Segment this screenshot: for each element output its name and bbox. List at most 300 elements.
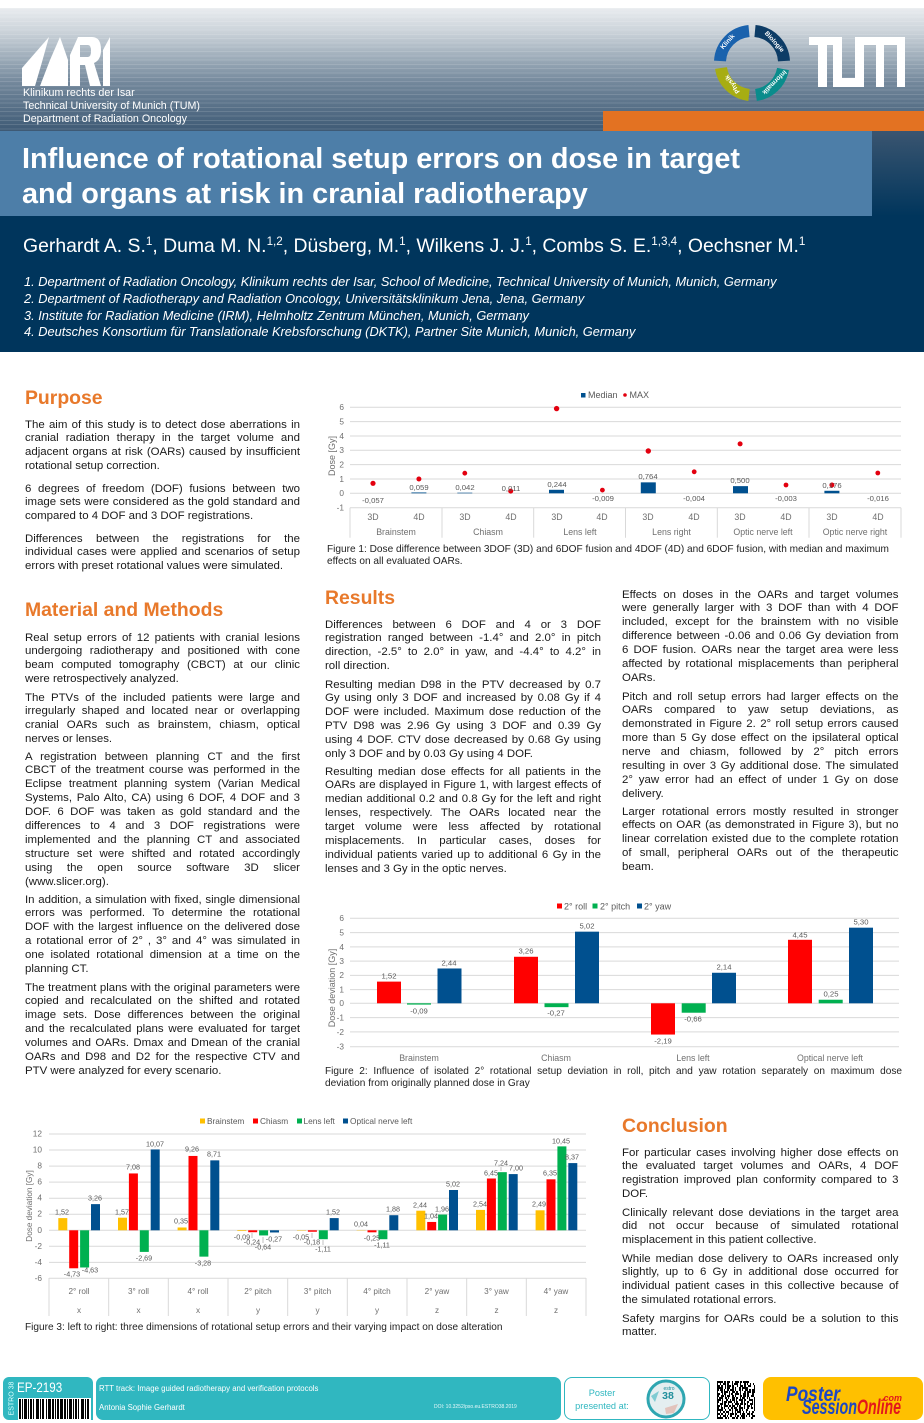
chart: figure 1 dose difference: Brainstem (376, 527, 416, 537)
chart: figure 3 rotational errors: 4° roll (187, 1287, 209, 1296)
chart: figure 1 dose difference: Lens left (563, 527, 597, 537)
poster number: EP-2193 (17, 1380, 62, 1395)
chart: figure 3 rotational errors: x (196, 1306, 200, 1315)
text: methods 3: CBCT of the treatment course was performed in the (25, 764, 300, 776)
chart: figure 3 rotational errors: 6,35 (543, 1168, 557, 1178)
title (22, 143, 740, 210)
text: methods 2: cranial OARs such as brainstem, chiasm, optical (25, 719, 300, 731)
chart: figure 3 rotational errors: 8 (37, 1160, 42, 1170)
text: methods 5: The treatment plans with the original parameters were (25, 982, 300, 994)
text: methods 4 (25, 894, 300, 975)
text: results 5: Pitch and roll setup errors had larger effects on the (622, 690, 898, 702)
chart: figure 3 rotational errors: 7,08 (126, 1162, 140, 1172)
chart: figure 2 dose deviation: 5,02 (580, 921, 594, 930)
qr code (717, 1381, 755, 1419)
chart: figure 3 rotational errors: -4 (35, 1257, 42, 1267)
logo: ring: Klinik (719, 33, 737, 51)
chart: figure 3 rotational errors: z (435, 1306, 439, 1315)
chart: figure 2 dose deviation: Optical nerve left (797, 1053, 864, 1063)
presented text: presented at: (575, 1400, 629, 1410)
chart: figure 1 dose difference: Lens right (652, 527, 691, 537)
chart: figure 3 rotational errors: 1,52 (55, 1208, 69, 1216)
text: methods 2 (25, 692, 300, 745)
legend: figure 3: Chiasm (260, 1116, 288, 1126)
footer: presented at box (564, 1377, 710, 1420)
chart: figure 3 rotational errors: x (77, 1306, 81, 1315)
text: purpose 1: rotational setup correction. (25, 460, 160, 472)
chart: figure 1 dose difference: 3D (642, 512, 654, 522)
chart: figure 1 dose difference: 3D (459, 512, 471, 522)
chart: figure 1 dose difference: Dose [Gy] (327, 436, 337, 476)
chart: figure 3 rotational errors: z (554, 1306, 558, 1315)
text: results 5: nerve and chiasm, followed by 2° pitch errors (622, 746, 898, 758)
chart: figure 1 dose difference: 0,500 (730, 476, 750, 485)
chart: figure 1 dose difference: 5 (339, 416, 344, 426)
text: results 5: more than 5 Gy dose effect on the ipsilateral optical (622, 732, 898, 744)
chart: figure 1 dose difference: 3 (339, 445, 344, 455)
text: conclusion 1 (622, 1146, 898, 1200)
chart: figure 1 dose difference: 4D (688, 512, 700, 522)
text: methods 5: OARs and D98 and D2 for the respective CTV and (25, 1051, 300, 1063)
text: results 4: included, except for the brainstem with no visible (622, 616, 898, 628)
caption: figure 3: Figure 3: left to right: three dimensions of rotational setup errors and their varying impact on dose alteration (25, 1322, 502, 1333)
chart: figure 3 rotational errors: -3,28 (195, 1258, 211, 1268)
chart: figure 3 rotational errors: 3° yaw (484, 1287, 509, 1296)
chart: figure 1 dose difference: 4D (505, 512, 517, 522)
text: purpose 2: image sets were considered as the gold standard and (25, 496, 300, 508)
text: results 5: delivery. (622, 788, 664, 800)
text: results 1: registration ranged between -1.4° and 2.0° in pitch (325, 632, 601, 644)
text: results 5: 2° yaw error had an effect of under 1 Gy on dose (622, 774, 898, 786)
chart: figure 1 dose difference: 0,176 (822, 481, 842, 490)
heading: Conclusion: Conclusion (622, 1114, 728, 1136)
text: results 6: Larger rotational errors mostly resulted in stronger (622, 806, 898, 818)
chart: figure 3 rotational errors: 4° pitch (363, 1287, 391, 1296)
chart: figure 3 rotational errors: 1,96 (435, 1204, 449, 1214)
chart: figure 3 rotational errors: y (315, 1306, 320, 1315)
text: purpose 1: adjacent organs at risk (OARs) caused by insufficient (25, 446, 300, 458)
chart: figure 3 rotational errors: 0,04 (354, 1220, 368, 1228)
text: purpose 1 (25, 418, 300, 472)
text: methods 4: DOF with the largest influence on the delivered dose (25, 921, 300, 933)
congress logo: 38 (662, 1390, 674, 1402)
text: results 4: were generally larger with 3 DOF than with 4 DOF (622, 602, 898, 614)
text: conclusion 3: individual patient cases in this collective because of (622, 1280, 898, 1292)
text: methods 3: Systems, Palo Alto, CA) using 6 DOF, 4 DOF and 3 (25, 792, 300, 804)
text: results 4: 6 DOF fusion. OARs near the target area were less (622, 644, 898, 656)
presented text: Poster (589, 1388, 615, 1398)
logo: ring: Physik (724, 73, 742, 94)
chart: figure 3 rotational errors: -0,24 (244, 1238, 260, 1246)
text: conclusion 1: For particular cases involving higher dose effects on (622, 1146, 898, 1158)
chart: figure 3 rotational errors: 12 (33, 1128, 42, 1138)
chart: figure 1 dose difference: 3D (734, 512, 746, 522)
text: results 3: misplacements. In particular cases, doses for (325, 835, 601, 847)
heading: Results: Results (325, 586, 395, 608)
text: methods 3: implemented and the planning CT and associated (25, 834, 300, 846)
chart: figure 3 rotational errors: 2° pitch (244, 1287, 272, 1296)
congress logo (646, 1380, 686, 1418)
chart: figure 3 rotational errors: -4,63 (82, 1266, 98, 1274)
chart: figure 2 dose deviation: -0,66 (684, 1015, 702, 1024)
chart: figure 3 rotational errors: 0 (37, 1225, 42, 1235)
chart: figure 1 dose difference: Chiasm (473, 527, 503, 537)
text: results 2: Resulting median D98 in the PTV decreased by 0.7 (325, 678, 601, 690)
chart: figure 3 rotational errors: 5,02 (446, 1180, 460, 1188)
legend: figure 3: Lens left (304, 1116, 336, 1126)
text: methods 2: irregularly shaped and located near or overlapping (25, 705, 300, 717)
chart: figure 1 dose difference: 0,011 (502, 484, 520, 493)
chart: figure 3 rotational errors: 6 (37, 1176, 42, 1186)
chart: figure 3 rotational errors: 2,44 (413, 1200, 427, 1210)
chart: figure 1 dose difference: -0,009 (592, 494, 614, 503)
chart: figure 3 rotational errors: 7,24 (494, 1158, 508, 1168)
text: results 3: OARs are displayed in Figure 1, with largest effects of (325, 779, 601, 791)
caption: figure 2: deviation from originally planned dose in Gray (325, 1078, 530, 1089)
chart: figure 3 rotational errors: 4° yaw (544, 1287, 568, 1296)
text: results 4: Effects on doses in the OARs and target volumes (622, 588, 898, 600)
text: methods 5 (25, 982, 300, 1077)
legend: figure 1: Median (588, 390, 618, 400)
chart: figure 3 rotational errors: 8,37 (565, 1152, 579, 1162)
text: methods 1: beam computed tomography (CBCT) at our clinic (25, 659, 300, 671)
chart: figure 2 dose deviation: 3,26 (519, 946, 533, 955)
chart: figure 3 rotational errors: -4,73 (64, 1270, 80, 1278)
chart: figure 3 rotational errors: 1,04 (424, 1212, 438, 1220)
median bars (411, 482, 839, 493)
text: methods 5: volumes and OARs. Dmax and Dmean of the cranial (25, 1037, 300, 1049)
logo: ring (714, 25, 790, 101)
chart: figure 1 dose difference: 1 (339, 474, 344, 484)
poster session online logo: .com (881, 1393, 902, 1403)
chart: figure 1 dose difference (327, 390, 902, 538)
legend: figure 2 (557, 902, 672, 912)
chart: figure 2 dose deviation: 1 (339, 984, 344, 994)
footer: track box (96, 1377, 561, 1420)
legend: figure 1: MAX (630, 390, 649, 400)
text: results 3: lenses and 3 Gy in the optic nerves. (325, 863, 507, 875)
text: results 3: median additional 0.2 and 0.8 Gy for the left and right (325, 793, 601, 805)
presented text (575, 1388, 629, 1411)
chart: figure 2 dose deviation: -2,19 (654, 1037, 672, 1046)
text: methods 3: structure set were shifted and rotated accordingly (25, 848, 300, 860)
text: conclusion 1: DOF. (622, 1188, 648, 1200)
affiliations (24, 274, 778, 339)
text: methods 3: (www.slicer.org). (25, 876, 109, 888)
chart: figure 2 dose deviation (327, 902, 899, 1063)
chart: figure 2 dose deviation: 2 (339, 970, 344, 980)
text: conclusion 2: misplacement in this patient collective. (622, 1234, 817, 1246)
chart: figure 3 rotational errors: 8,71 (207, 1150, 221, 1158)
chart: figure 1 dose difference: -0,003 (775, 494, 797, 503)
chart: figure 3 rotational errors: z (494, 1306, 499, 1315)
chart: figure 2 dose deviation: 6 (339, 913, 344, 923)
barcode (18, 1398, 91, 1420)
legend: figure 3: Brainstem (207, 1116, 244, 1126)
chart: figure 3 rotational errors: 1,88 (386, 1204, 400, 1214)
text: methods 5: image sets. Dose differences between the original (25, 1009, 300, 1021)
institution lines: Technical University of Munich (TUM) (23, 100, 200, 112)
text: methods 3: using the open source software 3D slicer (25, 862, 300, 874)
orange accent bar (603, 111, 924, 131)
chart: figure 1 dose difference: Optic nerve right (823, 527, 888, 537)
chart: figure 2 dose deviation: Lens left (676, 1053, 710, 1063)
text: results 2: Gy using only 3 DOF and increased by 0.08 Gy if 4 (325, 692, 601, 704)
text: methods 3: A registration between planning CT and the first (25, 750, 300, 762)
authors: Gerhardt A. S.1, Duma M. N.1,2, Düsberg, M.1, Wilkens J. J.1, Combs S. E.1,3,4, Oechsner M.1 (23, 235, 805, 257)
text: methods 4: a rotational error of 2° , 3° and 4° was simulated in (25, 935, 300, 947)
chart: figure 1 dose difference: 2 (339, 460, 344, 470)
chart: figure 2 dose deviation: 4 (339, 942, 344, 952)
text: results 4: affected by rotational misplacements than peripheral (622, 658, 898, 670)
chart: figure 1 dose difference: Optic nerve left (733, 527, 793, 537)
text: methods 2: nerves or lenses. (25, 733, 112, 745)
chart: figure 3 rotational errors: -0,09 (234, 1232, 250, 1242)
header banner (0, 8, 924, 131)
institution lines (23, 87, 200, 125)
chart: figure 2 dose deviation: -1 (337, 1012, 344, 1022)
chart: figure 3 rotational errors: -1,11 (374, 1240, 390, 1250)
text: purpose 3 (25, 532, 300, 572)
chart: figure 1 dose difference: 3D (551, 512, 563, 522)
chart: figure 3 rotational errors: 2° yaw (425, 1287, 449, 1296)
chart: figure 1 dose difference: -0,004 (683, 494, 706, 503)
dark navy header background (0, 131, 924, 352)
text: results 5: OARs compared to yaw setup deviations, as (622, 704, 898, 716)
chart: figure 2 dose deviation: 2,44 (442, 959, 457, 968)
legend: figure 2: 2° pitch (600, 902, 630, 912)
caption: figure 1: effects on all evaluated OARs. (327, 556, 463, 567)
text: purpose 3: errors with preset rotational values were simulated. (25, 560, 283, 572)
text: methods 4: In addition, a simulation with fixed, single dimensional (25, 894, 300, 906)
chart: figure 3 rotational errors: 2,49 (532, 1200, 546, 1208)
text: conclusion 4: matter. (622, 1326, 657, 1338)
chart: figure 2 dose deviation: -2 (337, 1027, 344, 1037)
text: results 4: difference between -0.06 and 0.06 Gy deviation from (622, 630, 898, 642)
text: methods 2: The PTVs of the included patients were large and (25, 692, 300, 704)
chart: figure 2 dose deviation: 4,45 (793, 931, 807, 940)
text: results 5 (622, 690, 898, 800)
text: conclusion 2: did not occur because of simulated rotational (622, 1220, 898, 1232)
text: results 3: individual patients varied up to additional 6 Gy in the (325, 849, 601, 861)
chart: figure 3 rotational errors: 1,57 (115, 1208, 129, 1216)
chart: figure 3 rotational errors: -0,27 (266, 1234, 282, 1244)
text: results 6: of small, peripheral OARs out of the therapeutic (622, 847, 898, 859)
text: methods 4: errors was performed. To determine the rotational (25, 907, 300, 919)
chart: figure 3 rotational errors: 10,07 (146, 1140, 164, 1148)
logo: ring: Biologie (763, 30, 786, 54)
text: conclusion 1: registration improved plan conformity compared to 3 (622, 1174, 898, 1186)
poster session online logo: Session (802, 1396, 857, 1419)
footer: poster id box (3, 1377, 93, 1420)
legend: figure 1 (581, 390, 649, 400)
chart: figure 2 dose deviation: Chiasm (541, 1053, 571, 1063)
text: results 5: resulting in over 3 Gy additional dose. The simulated (622, 760, 898, 772)
institution lines: Klinikum rechts der Isar (23, 87, 135, 99)
title: and organs at risk in cranial radiotherapy (22, 178, 588, 210)
chart: figure 2 dose deviation: 0 (339, 998, 344, 1008)
heading: Purpose: Purpose (25, 386, 103, 408)
heading: Material and Methods: Material and Methods (25, 598, 223, 620)
author text: Antonia Sophie Gerhardt (99, 1403, 185, 1412)
text: results 1: Differences between 6 DOF and 4 or 3 DOF (325, 618, 601, 630)
text: conclusion 4 (622, 1312, 898, 1338)
chart: figure 3 rotational errors: 1,52 (326, 1208, 340, 1216)
text: conclusion 1: the evaluated target volumes and OARs, 4 DOF (622, 1160, 898, 1172)
chart: figure 1 dose difference: 4D (596, 512, 608, 522)
caption: figure 2 (325, 1066, 902, 1089)
chart: figure 2 dose deviation: -0,27 (547, 1008, 565, 1017)
chart: figure 1 dose difference: -0,057 (362, 496, 384, 505)
text: results 2: DOF were included. Maximum dose reduction of the (325, 706, 601, 718)
chart: figure 2 dose deviation: 5 (339, 928, 344, 938)
title: Influence of rotational setup errors on dose in target (22, 143, 740, 175)
chart: figure 3 rotational errors: 6,45 (484, 1168, 498, 1178)
text: results 4: OARs. (622, 672, 656, 684)
chart: figure 3 rotational errors: 2° roll (68, 1287, 90, 1296)
chart: figure 1 dose difference: 3D (826, 512, 838, 522)
text: methods 3 (25, 750, 300, 888)
chart: figure 1 dose difference: 3D (367, 512, 379, 522)
chart: figure 3 rotational errors: Dose deviation [Gy] (25, 1170, 34, 1242)
text: results 2: only 3 DOF and by 0.03 Gy using 4 DOF. (325, 748, 533, 760)
max markers (370, 406, 880, 494)
affiliations: 1. Department of Radiation Oncology, Klinikum rechts der Isar, School of Medicine, Technical University of Munich, Munich, Germany (24, 274, 777, 289)
chart: figure 2 dose deviation: -0,09 (410, 1007, 428, 1016)
text: conclusion 3: slightly, up to 6 Gy in additional dose occurred for (622, 1266, 898, 1278)
text: conclusion 3: While median dose delivery to OARs increased only (622, 1252, 898, 1264)
legend: figure 2: 2° yaw (644, 902, 672, 912)
chart: figure 3 rotational errors: 7,00 (509, 1164, 523, 1172)
poster session online logo: Poster (786, 1383, 842, 1406)
chart: figure 3 rotational errors: -0,64 (255, 1242, 271, 1252)
congress logo: estro (663, 1386, 675, 1392)
chart: figure 3 rotational errors: 9,26 (185, 1144, 199, 1154)
text: results 3: Resulting median dose effects for all patients in the (325, 766, 601, 778)
leader lines (252, 1167, 501, 1245)
text: results 2 (325, 678, 601, 760)
text: results 1: direction, -2.5° to 2.0° in yaw, and -4.4° to 4.2° in (325, 646, 601, 658)
text: methods 5: and the recalculated plans were evaluated for target (25, 1023, 300, 1035)
chart: figure 1 dose difference: 0,042 (455, 483, 475, 492)
chart: figure 3 rotational errors: -0,25 (364, 1234, 380, 1242)
legend: figure 2: 2° roll (564, 902, 587, 912)
chart: figure 3 rotational errors: -0,05 (293, 1232, 309, 1242)
text: results 5: demonstrated in Figure 2. 2° roll setup errors caused (622, 718, 898, 730)
text: methods 1: Real setup errors of 12 patients with cranial lesions (25, 632, 300, 644)
chart: figure 2 dose deviation: 3 (339, 956, 344, 966)
vertical label: ESTRO 38 (8, 1382, 16, 1415)
text: results 1: roll direction. (325, 660, 390, 672)
chart: figure 2 dose deviation: Dose deviation [Gy] (327, 949, 337, 1027)
text: conclusion 4: Safety margins for OARs could be a solution to this (622, 1312, 898, 1324)
text: results 3: lenses, respectively. The OARs located near the (325, 807, 601, 819)
chart: figure 3 rotational errors: 3° pitch (304, 1287, 332, 1296)
text: methods 3: DOF. 6 DOF was taken as gold standard and the (25, 806, 300, 818)
chart: figure 3 rotational errors: 3,26 (88, 1194, 102, 1202)
poster session online logo: Online (857, 1396, 901, 1419)
chart: figure 3 rotational errors: 10 (33, 1144, 42, 1154)
chart: figure 3 rotational errors: -2 (35, 1241, 42, 1251)
chart: figure 3 rotational errors: 2 (37, 1208, 42, 1218)
chart: figure 2 dose deviation: 1,52 (382, 972, 396, 981)
caption: figure 2: Figure 2: Influence of isolated 2° rotational setup deviation in roll, pitch and yaw rotation separately on maximum dose (325, 1066, 902, 1077)
text: results 4 (622, 588, 898, 684)
text: conclusion 3 (622, 1252, 898, 1306)
chart: figure 1 dose difference: -1 (337, 502, 344, 512)
text: conclusion 3: the simulated rotational errors. (622, 1294, 776, 1306)
chart: figure 3 rotational errors (25, 1116, 586, 1316)
bars: roll pitch yaw (377, 928, 873, 1035)
chart: figure 1 dose difference: 0,059 (409, 483, 429, 492)
text: methods 3: differences to 4 and 3 DOF registrations were (25, 820, 300, 832)
chart: figure 3 rotational errors: -6 (35, 1273, 42, 1283)
title band (0, 131, 872, 216)
logo: TUM (809, 37, 905, 87)
text: purpose 2: 6 degrees of freedom (DOF) fusions between two (25, 482, 300, 494)
chart: figure 1 dose difference: 0,764 (638, 472, 658, 481)
text: methods 1 (25, 632, 300, 685)
text: methods 5: copied and recalculated on the shifted and rotated (25, 995, 300, 1007)
text: purpose 3: individual cases were applied and scenarios of setup (25, 546, 300, 558)
text: results 6: linear correlation existed due to the complete rotation (622, 833, 898, 845)
logo: ring: Informatik (760, 68, 788, 96)
chart: figure 2 dose deviation: 5,30 (854, 918, 868, 927)
text: purpose 3: Differences between the registrations for the (25, 532, 300, 544)
chart: figure 3 rotational errors: -0,18 (304, 1238, 320, 1246)
affiliations: 2. Department of Radiotherapy and Radiation Oncology, Universitätsklinikum Jena, Jena, Germany (24, 291, 584, 306)
legend: figure 3: Optical nerve left (350, 1116, 413, 1126)
text: purpose 2 (25, 482, 300, 522)
text: results 2: using 4 DOF. CTV dose decreased by 0.68 Gy using (325, 734, 601, 746)
chart: figure 2 dose deviation: 0,25 (824, 990, 838, 999)
text: methods 4: one isolated rotational dimension at a time on the (25, 949, 300, 961)
chart: figure 1 dose difference: 0 (339, 488, 344, 498)
chart: figure 1 dose difference: -0,016 (867, 494, 889, 503)
logo: MRI (22, 37, 110, 86)
chart: figure 3 rotational errors: 2,54 (473, 1200, 487, 1208)
poster session online logo (763, 1377, 923, 1420)
text: methods 5: PTV were analyzed for every scenario. (25, 1065, 221, 1077)
chart: figure 1 dose difference: 4D (780, 512, 792, 522)
text: results 6 (622, 806, 898, 873)
chart: figure 3 rotational errors: -2,69 (136, 1254, 152, 1262)
text: methods 4: planning CT. (25, 963, 89, 975)
track text: RTT track: Image guided radiotherapy and verification protocols (99, 1384, 318, 1393)
bars: four organs over nine rotations (58, 1146, 577, 1268)
chart: figure 3 rotational errors: 0,35 (174, 1216, 188, 1226)
text: results 3: target volume were less affected by rotational (325, 821, 601, 833)
chart: figure 1 dose difference: 0,244 (547, 480, 567, 489)
chart: figure 2 dose deviation: Brainstem (399, 1053, 439, 1063)
text: results 6: effects on OAR (as demonstrated in Figure 3), but no (622, 819, 898, 831)
chart: figure 3 rotational errors: y (375, 1306, 380, 1315)
chart: figure 3 rotational errors: 10,45 (552, 1136, 570, 1146)
text: methods 1: were retrospectively analyzed. (25, 673, 179, 685)
chart: figure 3 rotational errors: 4 (37, 1192, 42, 1202)
text: purpose 1: The aim of this study is to detect dose aberrations in (25, 418, 300, 430)
chart: figure 1 dose difference: 4D (872, 512, 884, 522)
chart: figure 3 rotational errors: x (136, 1306, 141, 1315)
caption: figure 1: Figure 1: Dose difference between 3DOF (3D) and 6DOF fusion and 4DOF (4D) and 6DOF fusion, with median and maximum (327, 544, 889, 555)
chart: figure 1 dose difference: 6 (339, 402, 344, 412)
chart: figure 3 rotational errors: y (256, 1306, 261, 1315)
text: conclusion 2 (622, 1206, 898, 1246)
chart: figure 1 dose difference: 4D (413, 512, 425, 522)
text: results 3 (325, 766, 602, 875)
text: methods 1: undergoing radiotherapy and positioned with cone (25, 645, 300, 657)
institution lines: Department of Radiation Oncology (23, 113, 187, 125)
